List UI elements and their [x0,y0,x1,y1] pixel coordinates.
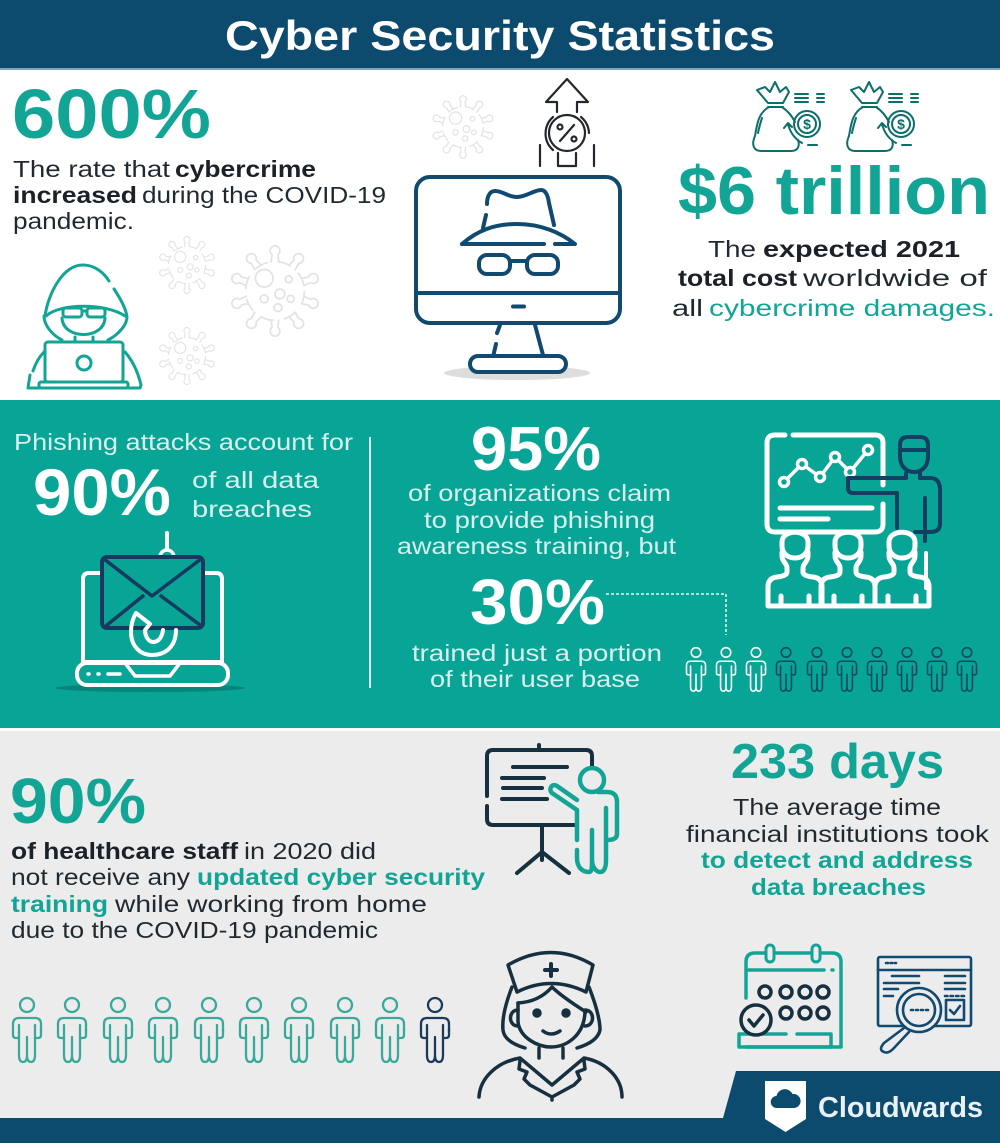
dashed connector [606,594,726,635]
logo cloud [771,1089,801,1108]
text: of all data breaches: of all data [192,467,319,493]
text: healthcare staff: while working from home [114,891,427,917]
icon: phishing laptop and envelope [55,533,245,692]
divider [369,437,371,688]
logo: Cloudwards [765,1081,983,1132]
text: healthcare staff: due to the COVID-19 pandemic [11,917,378,943]
text: cybercrime rate: pandemic. [13,208,134,234]
text: detection time: The average time [733,794,941,820]
coin symbol left: $ [803,116,811,132]
text: awareness training: awareness training, but [397,533,677,559]
stat: 90% phishing: 90% [33,455,171,529]
text: total cost [672,236,995,321]
icon: virus small upper [159,236,215,294]
text: awareness training [397,480,677,559]
text: detection time: financial institutions took [686,821,990,847]
coin symbol right: $ [897,116,905,132]
text: cybercrime rate: cybercrime [175,156,316,182]
icon: virus small lower [159,327,215,385]
text: healthcare staff: in 2020 did [244,838,376,864]
text: of all data breaches: breaches [192,496,312,522]
text: total cost: total cost [678,265,797,291]
text: trained a portion: trained just a portion [412,640,662,666]
icon: browser with magnifier [878,957,971,1053]
text: of all data breaches [192,467,319,522]
icon: nurse [479,952,622,1100]
icon: money bag right [847,82,918,151]
text: cybercrime rate [13,156,386,234]
icon: money bag left [753,82,824,151]
text: trained a portion: of their user base [430,666,640,692]
text: awareness training: to provide phishing [424,507,655,533]
text: detection time [686,794,990,900]
text: trained a portion [412,640,662,692]
icon: virus large [231,246,319,336]
text: total cost: all [672,295,703,321]
text: total cost: cybercrime damages. [709,295,995,321]
footer bar [0,1071,1000,1143]
text: total cost: expected 2021 [763,236,960,262]
icon: teacher at board [487,745,617,873]
stat: 600%: 600% [12,75,211,153]
panel: teal band [0,400,1000,728]
text: phishing attacks: Phishing attacks account for [14,429,353,455]
logo wordmark: Cloudwards [818,1092,983,1124]
icon: monitor with spy hat [416,177,620,380]
pictogram: 3 of 10 trained [686,648,977,691]
text: healthcare staff: updated cyber security [197,864,485,890]
text: total cost: worldwide of [802,265,988,291]
text: cybercrime rate: during the COVID-19 [142,182,386,208]
text: healthcare staff: not receive any [11,864,191,890]
text: healthcare staff [11,838,485,943]
pictogram: 9 of 10 healthcare staff [13,998,449,1062]
icon: percent with up arrow [540,79,594,166]
text: cybercrime rate: increased [13,182,137,208]
text: awareness training: of organizations claim [408,480,671,506]
text: detection time: to detect and address [701,847,973,873]
text: healthcare staff: training [11,891,108,917]
icon: calendar with check [739,945,841,1047]
title: Cyber Security Statistics [225,12,775,59]
icon: virus near monitor [432,96,494,158]
icon: presentation to audience [767,435,940,606]
stat: $6 trillion: $6 trillion [678,153,990,229]
text: total cost: The [708,236,756,262]
stat: 30%: 30% [470,566,605,638]
stat: 95%: 95% [471,415,601,484]
text: healthcare staff: of healthcare staff [11,838,238,864]
header banner [0,0,1000,70]
stat: 90% healthcare: 90% [10,765,146,837]
logo shield [765,1081,806,1132]
icon: hooded hacker with laptop [28,265,141,388]
panel: gray band [0,731,1000,1118]
stat: 233 days: 233 days [731,735,944,789]
text: detection time: data breaches [751,874,926,900]
text: cybercrime rate: The rate that [13,156,171,182]
